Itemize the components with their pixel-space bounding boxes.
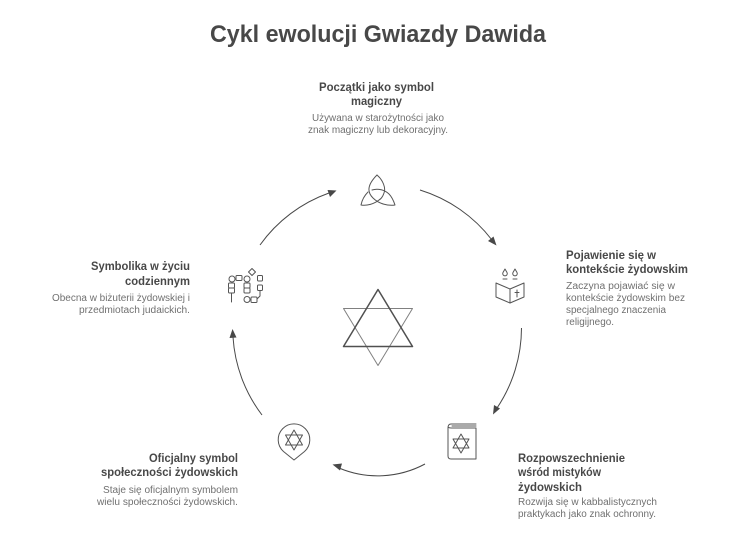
heading: step 4: Oficjalny symbol bbox=[149, 451, 238, 465]
panel: step 5 text bbox=[52, 259, 190, 316]
heading: step 2 bbox=[566, 248, 688, 276]
description: step 5: przedmiotach judaickich. bbox=[79, 305, 190, 316]
description: step 2 bbox=[566, 281, 685, 328]
heading: step 5: codziennym bbox=[125, 274, 190, 288]
description: step 2: specjalnego znaczenia bbox=[566, 305, 667, 316]
description: step 4: Staje się oficjalnym symbolem bbox=[103, 485, 238, 496]
panel: step 1 text bbox=[308, 80, 448, 136]
icon: location pin with star bbox=[278, 424, 310, 460]
description: step 2: religijnego. bbox=[566, 317, 614, 328]
central Star of David bbox=[344, 290, 412, 366]
description: step 4: wielu społeczności żydowskich. bbox=[96, 497, 238, 508]
panel: step 2 text bbox=[566, 248, 688, 328]
description: step 4 bbox=[96, 485, 238, 508]
icon: triquetra knot bbox=[361, 175, 395, 205]
heading: step 4: społeczności żydowskich bbox=[101, 465, 238, 479]
panel: step 3 text bbox=[517, 451, 657, 520]
heading: step 1: magiczny bbox=[351, 94, 402, 108]
heading: step 5 bbox=[91, 259, 190, 288]
panel: step 4 text bbox=[96, 451, 238, 508]
description: step 5 bbox=[52, 293, 190, 316]
description: step 1: znak magiczny lub dekoracyjny. bbox=[308, 125, 448, 136]
heading: step 3: wśród mistyków bbox=[517, 465, 602, 479]
description: step 5: Obecna w biżuterii żydowskiej i bbox=[52, 293, 190, 304]
description: step 3: Rozwija się w kabbalistycznych bbox=[518, 497, 657, 508]
heading: step 1: Początki jako symbol bbox=[319, 80, 434, 94]
icon: beaded jewellery bbox=[228, 268, 262, 302]
icon: open book with drops bbox=[496, 269, 524, 303]
description: step 3 bbox=[518, 497, 657, 520]
description: step 3: praktykach jako znak ochronny. bbox=[518, 509, 656, 520]
arrow: step 5 to 1 bbox=[260, 190, 336, 245]
arrow: step 2 to 3 bbox=[493, 328, 522, 414]
heading: step 5: Symbolika w życiu bbox=[91, 259, 190, 273]
heading: step 1 bbox=[319, 80, 434, 108]
heading: step 3 bbox=[517, 451, 625, 494]
description: step 2: Zaczyna pojawiać się w bbox=[566, 281, 676, 292]
arrow: step 1 to 2 bbox=[420, 190, 496, 246]
heading: step 4 bbox=[101, 451, 238, 479]
heading: step 3: Rozpowszechnienie bbox=[518, 451, 625, 465]
description: step 1 bbox=[308, 113, 448, 136]
arrow: step 3 to 4 bbox=[332, 464, 425, 476]
description: step 2: kontekście żydowskim bez bbox=[566, 293, 685, 304]
heading: step 2: kontekście żydowskim bbox=[566, 262, 688, 276]
heading: step 2: Pojawienie się w bbox=[566, 248, 657, 262]
arrow: step 4 to 5 bbox=[230, 329, 262, 415]
description: step 1: Używana w starożytności jako bbox=[312, 113, 444, 124]
heading: step 3: żydowskich bbox=[518, 480, 582, 494]
icon: book with star bbox=[448, 424, 476, 459]
title: Cykl ewolucji Gwiazdy Dawida bbox=[210, 21, 547, 48]
